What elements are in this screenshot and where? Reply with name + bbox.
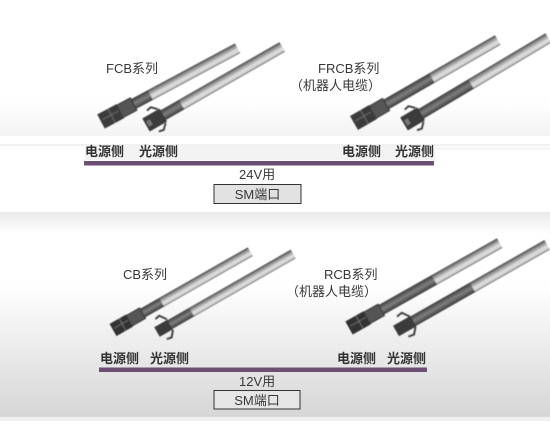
labels: 24V right pair: 电源侧 [342,144,381,159]
labels: 12V right pair: 电源侧 [337,351,376,366]
cable: FRCB light side [397,27,550,135]
subheading: FRCB robot cable: （机器人电缆） [290,78,381,93]
label: 24V: 24V用 [239,167,275,182]
cable: RCB power side [345,237,503,335]
cable: CB power side [110,246,254,336]
background: lower panel [0,212,550,421]
box: SM port 24V [214,184,301,204]
labels: 12V left pair: 光源侧 [150,351,189,366]
background: upper panel [0,100,550,160]
labels: 24V left pair: 光源侧 [139,144,178,159]
labels: 12V right pair [337,351,426,366]
heading: CB series: CB系列 [123,267,167,282]
labels: 24V right pair: 光源侧 [395,144,434,159]
divider bar: 24V [84,161,434,166]
box: SM port 12V [214,390,300,409]
subheading: RCB robot cable: （机器人电缆） [286,284,377,299]
cable: FCB light side [140,36,289,136]
box: SM port 12V: SM端口 [234,393,280,408]
cable: FRCB power side [350,33,502,130]
label: 12V: 12V用 [239,374,275,389]
cable: RCB light side [390,233,550,341]
labels: 12V left pair: 电源侧 [100,351,139,366]
box: SM port 24V: SM端口 [235,187,280,202]
labels: 12V left pair [100,351,189,366]
cable: FCB power side [97,41,241,129]
heading: FCB series: FCB系列 [106,61,158,76]
labels: 24V right pair [342,144,434,159]
labels: 12V right pair: 光源侧 [387,351,426,366]
labels: 24V left pair [85,144,178,159]
labels: 24V left pair: 电源侧 [85,144,124,159]
cable: CB light side [151,243,299,342]
heading: FRCB series: FRCB系列 [318,61,379,76]
heading: RCB series: RCB系列 [324,267,377,282]
divider bar: 12V [99,368,427,372]
